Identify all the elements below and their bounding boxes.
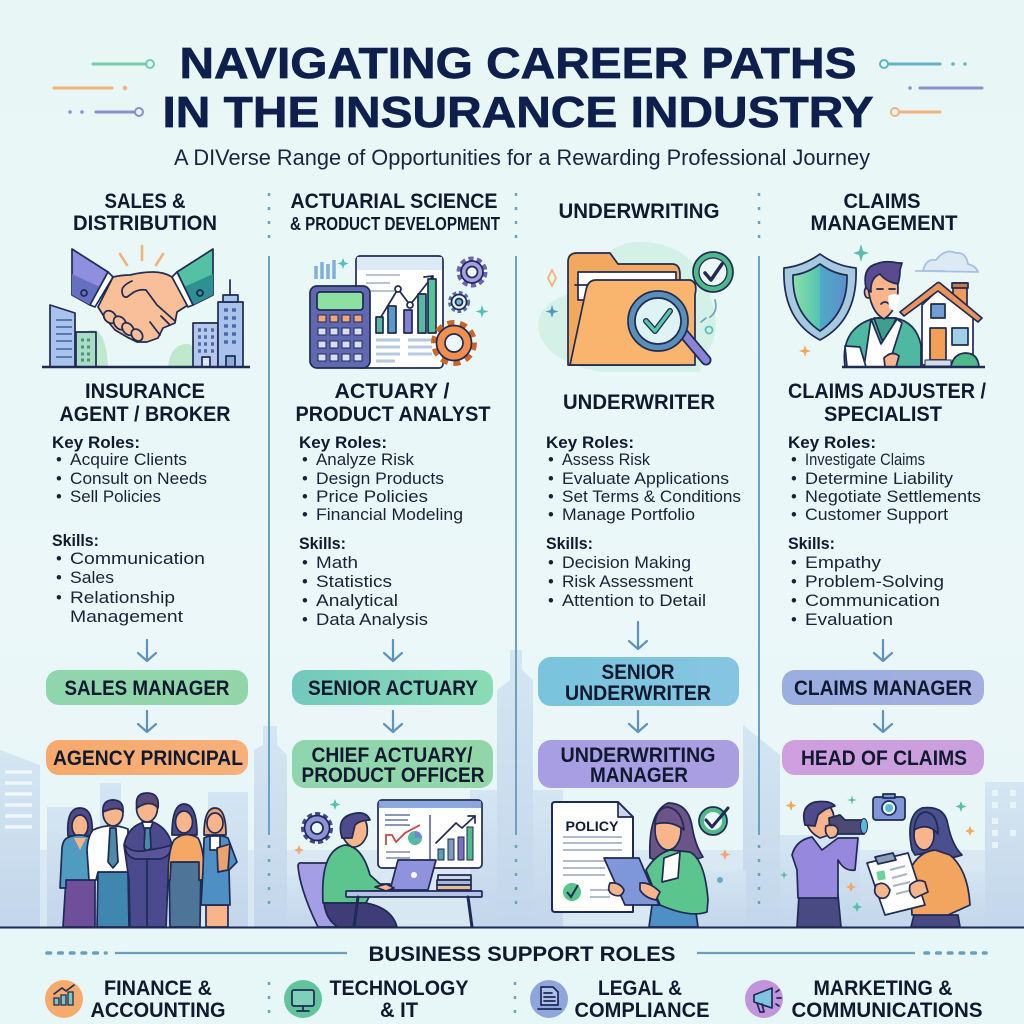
title: IN THE INSURANCE INDUSTRY	[162, 88, 874, 137]
key roles list: •	[548, 488, 554, 506]
skills list	[299, 534, 428, 629]
role title	[788, 380, 986, 426]
heading: claims management: CLAIMS	[844, 190, 920, 213]
subtitle: A DIVerse Range of Opportunities for a Rewarding Professional Journey	[174, 145, 870, 170]
key roles list	[788, 433, 981, 524]
skills list: •	[548, 573, 554, 591]
skills list: •	[791, 554, 797, 572]
role title: UNDERWRITER	[563, 391, 715, 414]
decorative title accents left	[54, 60, 154, 116]
pill: sales manager	[46, 670, 248, 705]
icon: calculator, report and gears	[310, 256, 488, 368]
skills list: •	[302, 573, 308, 591]
key roles list: •	[302, 470, 308, 488]
skills list: •	[302, 554, 308, 572]
role title: CLAIMS ADJUSTER /	[788, 380, 986, 403]
pill: underwriting manager: UNDERWRITING	[560, 744, 716, 767]
support role: finance and accounting: ACCOUNTING	[90, 999, 226, 1022]
key roles list: Key Roles:	[299, 433, 387, 452]
footer: business support roles	[0, 928, 1024, 1024]
pill: senior underwriter: SENIOR	[602, 661, 674, 684]
skyline background	[0, 650, 1024, 927]
skills list: Statistics	[316, 573, 392, 591]
heading: sales and distribution: DISTRIBUTION	[73, 212, 217, 235]
key roles list: Key Roles:	[52, 433, 140, 452]
skills list: •	[56, 550, 62, 568]
key roles list: Price Policies	[316, 488, 428, 506]
key roles list: Customer Support	[805, 506, 948, 524]
arrow	[138, 640, 156, 661]
key roles list: •	[791, 506, 797, 524]
skills list: •	[791, 611, 797, 629]
heading: underwriting: UNDERWRITING	[558, 200, 720, 223]
skills list: Problem-Solving	[805, 573, 944, 591]
key roles list: •	[548, 451, 554, 469]
skills list: •	[302, 592, 308, 610]
pill: head of claims: HEAD OF CLAIMS	[801, 747, 967, 770]
support role: legal and compliance: LEGAL &	[598, 977, 682, 1000]
key roles list	[299, 433, 463, 524]
title: NAVIGATING CAREER PATHS	[180, 39, 856, 88]
role title: AGENT / BROKER	[60, 403, 230, 426]
decorative title accents right	[880, 60, 982, 116]
heading: business support roles: BUSINESS SUPPORT ROLES	[368, 943, 676, 966]
pill: claims manager: CLAIMS MANAGER	[794, 677, 972, 700]
key roles list: Investigate Claims	[805, 451, 925, 469]
panel: actuarial science and product development	[290, 190, 501, 927]
skills list: •	[548, 592, 554, 610]
support role: technology and IT	[284, 977, 468, 1022]
key roles list: •	[302, 488, 308, 506]
icon: folder, magnifier and check badge	[538, 242, 733, 372]
skills list: •	[56, 569, 62, 587]
role title	[296, 380, 491, 426]
support role: marketing and communications	[745, 977, 982, 1022]
skills list: Decision Making	[562, 554, 691, 572]
skills list: Management	[70, 608, 183, 626]
heading: claims management	[810, 190, 958, 235]
skills list: •	[302, 611, 308, 629]
skills list: •	[791, 573, 797, 591]
arrow	[629, 711, 647, 732]
skills list: •	[791, 592, 797, 610]
support role: legal and compliance	[530, 977, 710, 1022]
heading: sales and distribution: SALES &	[104, 190, 186, 213]
pill: senior actuary: SENIOR ACTUARY	[308, 677, 478, 700]
key roles list: •	[548, 506, 554, 524]
skills list: Attention to Detail	[562, 592, 706, 610]
support role: marketing and communications: COMMUNICATIONS	[792, 999, 982, 1022]
key roles list: Assess Risk	[562, 451, 651, 469]
skills list: Skills:	[299, 534, 346, 553]
skills list: Evaluation	[805, 611, 893, 629]
support role: technology and IT: TECHNOLOGY	[330, 977, 468, 1000]
arrow	[138, 711, 156, 732]
key roles list: •	[791, 488, 797, 506]
key roles list: •	[56, 470, 62, 488]
skills list: Communication	[805, 592, 940, 610]
heading: claims management: MANAGEMENT	[810, 212, 958, 235]
skills list: Sales	[70, 569, 114, 587]
skills list: Skills:	[788, 534, 835, 553]
skills list: Analytical	[316, 592, 398, 610]
key roles list: Design Products	[316, 470, 444, 488]
pill: underwriting manager	[538, 740, 739, 788]
pill: agency principal: AGENCY PRINCIPAL	[53, 747, 243, 770]
arrow	[874, 711, 892, 732]
support role: technology and IT: & IT	[380, 999, 418, 1022]
panel: sales and distribution	[42, 190, 250, 927]
key roles list: Sell Policies	[70, 488, 161, 506]
key roles list: Determine Liability	[805, 470, 954, 488]
key roles list: Evaluate Applications	[562, 470, 729, 488]
key roles list: •	[302, 506, 308, 524]
key roles list	[546, 433, 741, 524]
illustration: photographer and claims specialist	[780, 794, 975, 927]
key roles list: •	[791, 451, 797, 469]
key roles list: Consult on Needs	[70, 470, 207, 488]
icon: shield, injured person and house	[784, 244, 985, 367]
skills list: Data Analysis	[316, 611, 428, 629]
illustration: policy document and underwriter	[552, 802, 730, 927]
panel: underwriting	[538, 200, 741, 927]
pill: chief actuary	[292, 740, 493, 788]
key roles list: •	[56, 451, 62, 469]
pill: underwriting manager: MANAGER	[590, 764, 688, 787]
pill: senior actuary	[292, 670, 493, 705]
pill: agency principal	[46, 740, 248, 775]
arrow	[384, 711, 402, 732]
pill: sales manager: SALES MANAGER	[64, 677, 230, 700]
support role: finance and accounting	[45, 977, 226, 1022]
title	[162, 39, 874, 137]
pill: claims manager	[782, 670, 984, 705]
key roles list	[52, 433, 207, 506]
skills list: Relationship	[70, 589, 175, 607]
skills list	[546, 534, 706, 610]
role title: ACTUARY /	[334, 380, 450, 403]
skills list: •	[548, 554, 554, 572]
role title: SPECIALIST	[824, 403, 942, 426]
key roles list: Key Roles:	[546, 433, 634, 452]
key roles list: Financial Modeling	[316, 506, 463, 524]
illustration: analyst at desk	[294, 799, 482, 927]
arrow	[874, 640, 892, 661]
key roles list: Manage Portfolio	[562, 506, 695, 524]
support role: finance and accounting: FINANCE &	[104, 977, 212, 1000]
heading: sales and distribution	[73, 190, 217, 235]
skills list	[52, 531, 205, 626]
skills list: •	[56, 589, 62, 607]
key roles list: •	[791, 470, 797, 488]
key roles list: •	[56, 488, 62, 506]
pill: senior underwriter: UNDERWRITER	[565, 682, 711, 705]
key roles list: Key Roles:	[788, 433, 876, 452]
key roles list: Set Terms & Conditions	[562, 488, 741, 506]
heading: actuarial science	[290, 190, 501, 234]
support role: marketing and communications: MARKETING &	[814, 977, 952, 1000]
heading: actuarial science: ACTUARIAL SCIENCE	[290, 190, 498, 213]
skills list: Communication	[70, 550, 205, 568]
skills list: Skills:	[546, 534, 593, 553]
skills list: Skills:	[52, 531, 99, 550]
skills list: Risk Assessment	[562, 573, 693, 591]
panel: claims management	[780, 190, 986, 927]
arrow	[384, 640, 402, 661]
pill: senior underwriter	[538, 657, 739, 706]
pill: head of claims	[782, 740, 984, 775]
support role: legal and compliance: COMPLIANCE	[574, 999, 710, 1022]
key roles list: Acquire Clients	[70, 451, 187, 469]
skills list	[788, 534, 944, 629]
key roles list: •	[548, 470, 554, 488]
role title	[60, 380, 230, 426]
key roles list: Negotiate Settlements	[805, 488, 981, 506]
pill: chief actuary: CHIEF ACTUARY/	[312, 744, 473, 767]
heading: actuarial science: & PRODUCT DEVELOPMENT	[290, 213, 501, 234]
skills list: Empathy	[805, 554, 882, 572]
illustration: team of professionals	[60, 793, 237, 927]
role title: INSURANCE	[85, 380, 205, 403]
pill: chief actuary: PRODUCT OFFICER	[302, 764, 484, 787]
key roles list: •	[302, 451, 308, 469]
role title: PRODUCT ANALYST	[296, 403, 491, 426]
arrow	[629, 622, 647, 649]
key roles list: Analyze Risk	[316, 451, 415, 469]
skills list: Math	[316, 554, 358, 572]
icon: handshake with city buildings	[42, 246, 250, 367]
column dividers	[269, 193, 759, 908]
illustration: policy document and underwriter: POLICY	[566, 818, 619, 834]
